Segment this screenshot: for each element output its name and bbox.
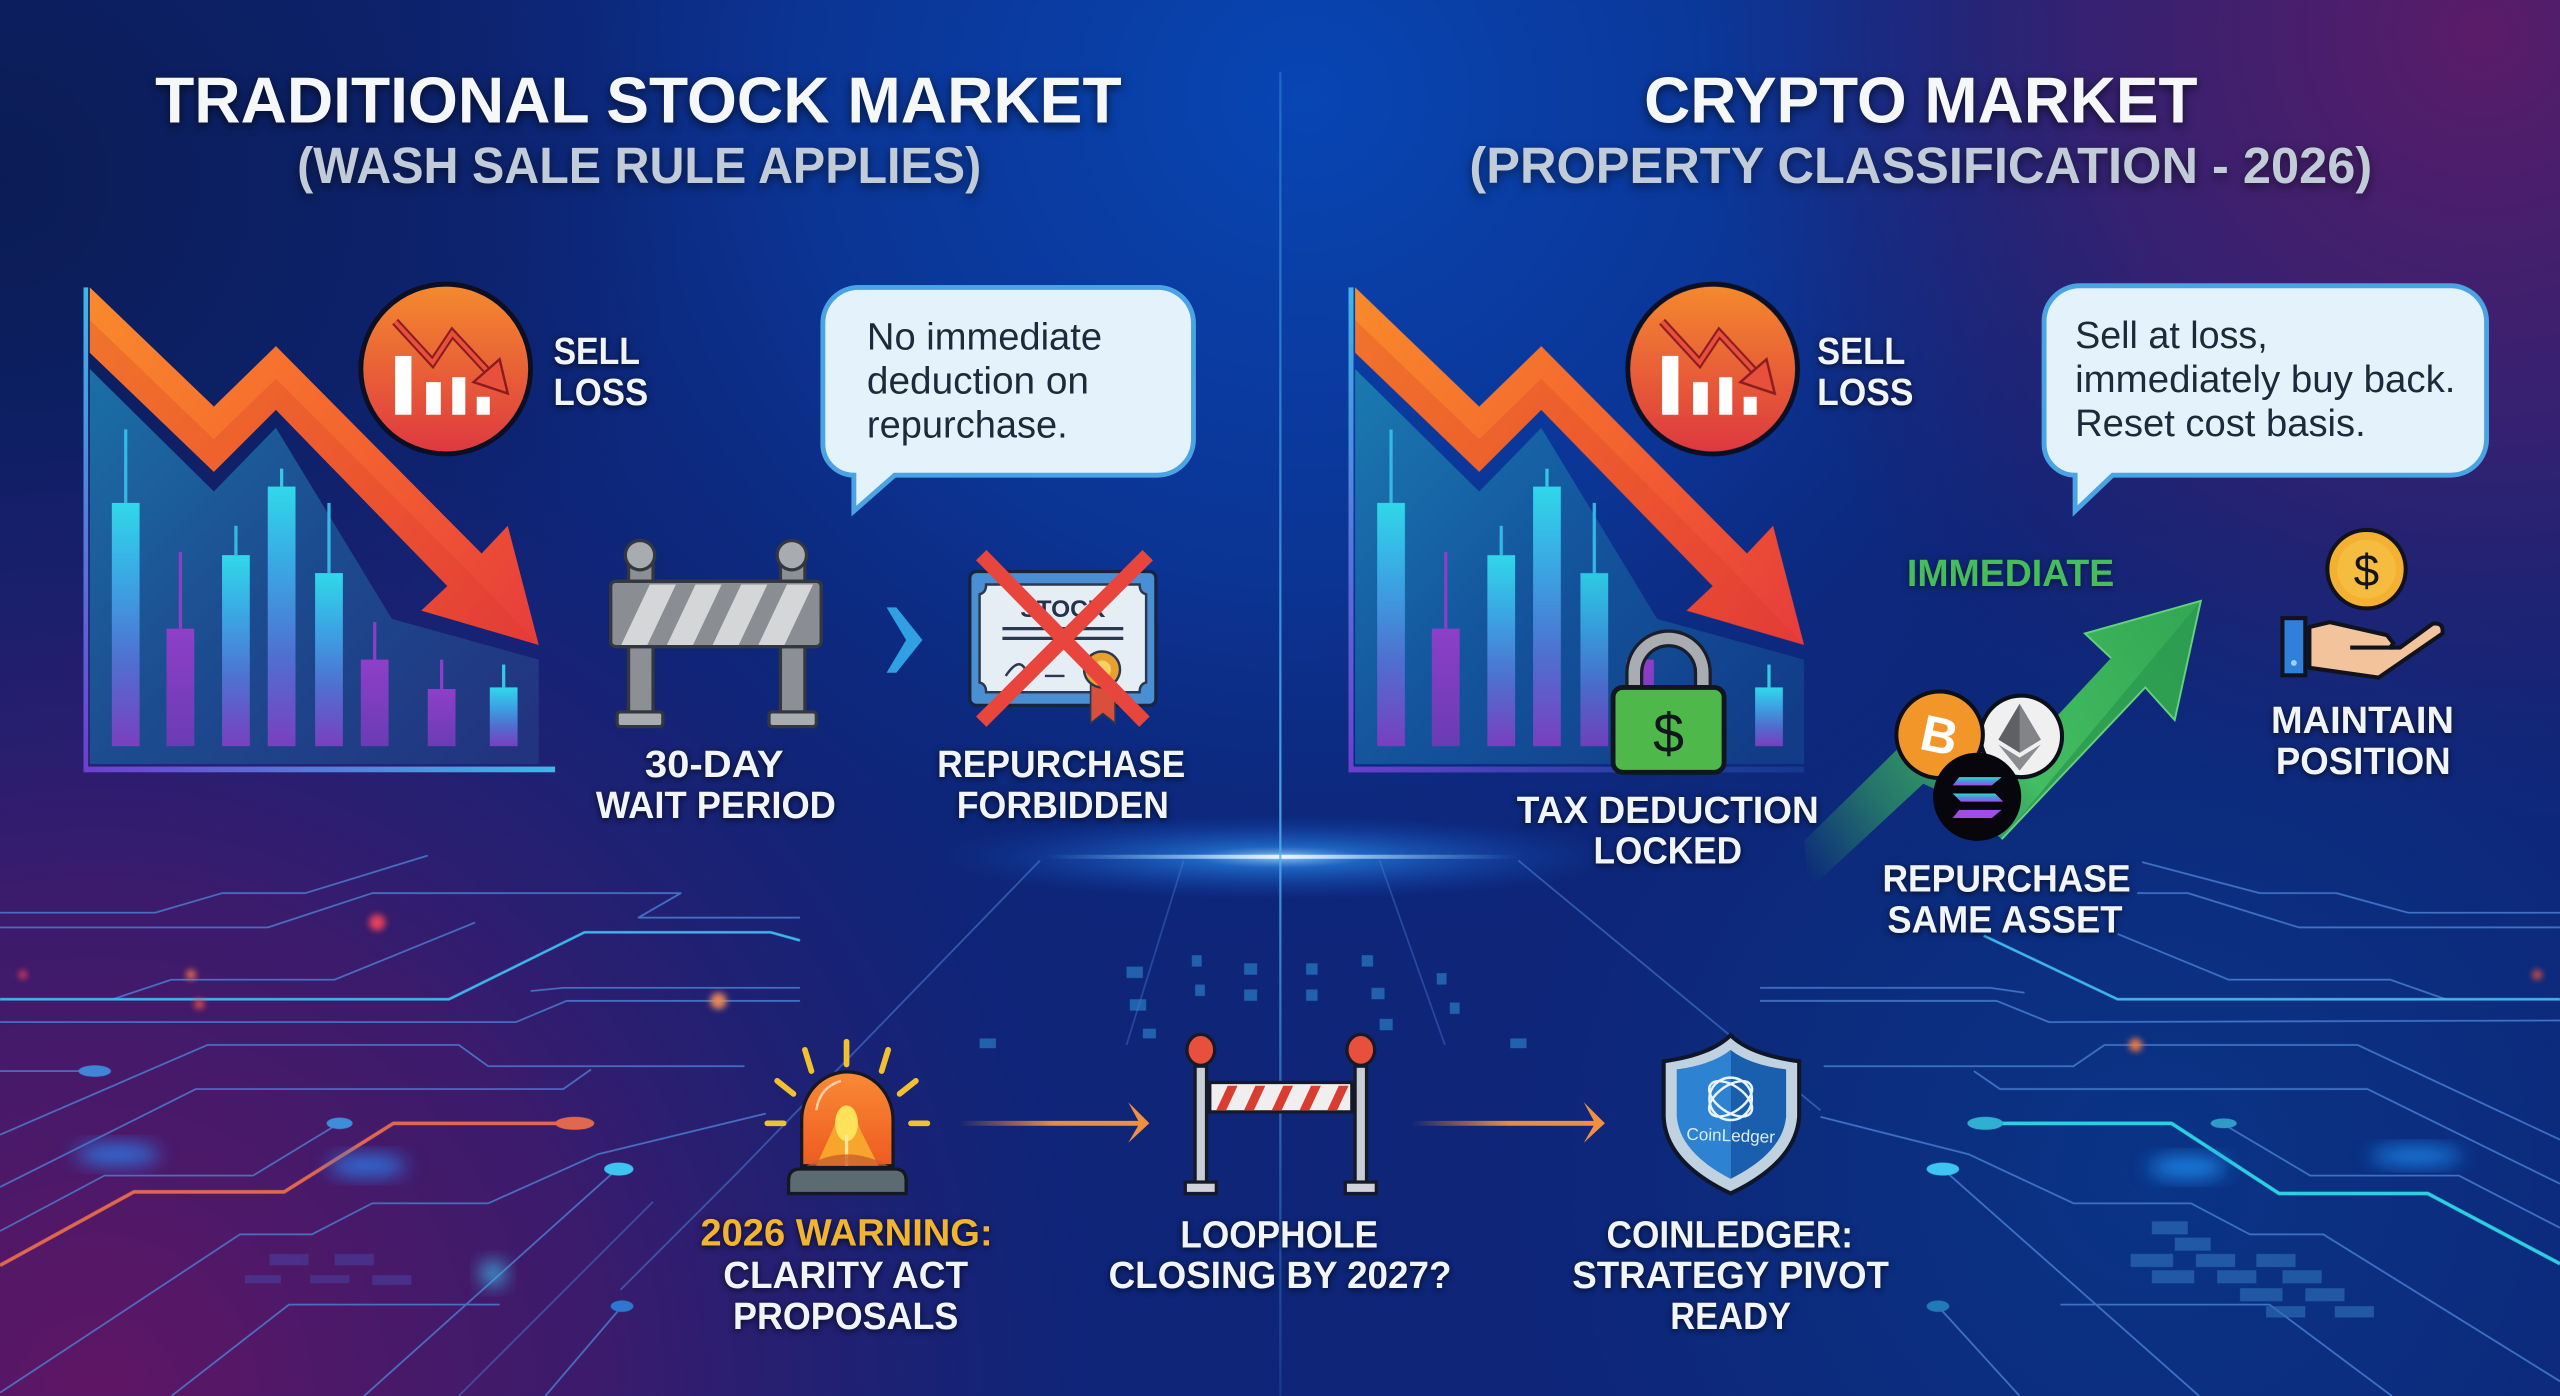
label: immediate: IMMEDIATE [1907,552,2114,594]
label: repurchase forbidden: REPURCHASE [937,743,1185,785]
icon: siren [767,1042,927,1194]
callout: sell at loss [2044,286,2487,511]
label: coinledger strategy: COINLEDGER: [1607,1213,1853,1255]
panel: traditional stock market [83,63,1193,826]
icon: stock certificate crossed out: STOCK [1020,596,1106,623]
icon: bitcoin: B [1916,704,1963,767]
label: tax deduction locked: TAX DEDUCTION [1517,789,1819,831]
callout: no immediate deduction: deduction on [867,360,1089,402]
label: repurchase forbidden [937,743,1185,826]
icon: sell loss badge [361,284,531,454]
icon: padlock with dollar: $ [1653,703,1684,765]
icon: coinledger shield: CoinLedger [1686,1124,1776,1147]
callout: no immediate deduction: repurchase. [867,404,1068,446]
icon: barrier [611,540,821,727]
label: maintain position [2271,699,2454,782]
label: 2026 warning [700,1212,993,1337]
label: coinledger strategy: STRATEGY PIVOT [1572,1254,1889,1296]
icon: crypto coins [1896,691,2062,841]
icon: closing gate [1185,1034,1376,1194]
title: traditional stock market [155,63,1122,194]
label: 30-day wait period: 30-DAY [645,743,784,785]
label: coinledger strategy [1572,1213,1889,1337]
callout: sell at loss: Sell at loss, [2075,314,2268,356]
icon: ethereum [1980,696,2062,777]
icon: padlock with dollar [1613,638,1724,772]
chart: falling candlesticks with red arrow [1349,287,1804,772]
label: maintain position: MAINTAIN [2271,699,2454,741]
icon: sell loss badge [1628,284,1798,454]
label: 30-day wait period [596,743,836,826]
title: crypto market: (PROPERTY CLASSIFICATION - 2026) [1469,137,2372,194]
label: sell loss [553,330,648,413]
arrow: warning to loophole [958,1102,1149,1143]
panel: 2026 warning timeline [700,1034,1889,1337]
title: traditional stock market: TRADITIONAL STOCK MARKET [155,63,1122,136]
label: sell loss: SELL [553,330,640,372]
label: loophole closing [1109,1213,1451,1296]
label: 2026 warning: CLARITY ACT [723,1254,968,1296]
icon: hand holding coin: $ [2354,545,2379,596]
label: sell loss [1817,330,1913,413]
icon: hand holding coin [2282,530,2443,678]
label: repurchase same asset: SAME ASSET [1887,898,2123,940]
label: repurchase same asset: REPURCHASE [1882,857,2131,899]
label: sell loss: LOSS [1817,371,1913,413]
icon: bitcoin [1896,691,1983,778]
label: coinledger strategy: READY [1670,1295,1791,1337]
label: repurchase same asset [1882,857,2131,940]
title: traditional stock market: (WASH SALE RULE APPLIES) [297,137,981,194]
label: sell loss: SELL [1817,330,1905,372]
arrow: loophole to coinledger [1411,1102,1605,1143]
panel: crypto market [1349,63,2487,940]
title: crypto market: CRYPTO MARKET [1644,63,2198,136]
label: 2026 warning: 2026 WARNING: [700,1212,993,1254]
label: tax deduction locked [1517,789,1819,872]
label: maintain position: POSITION [2276,740,2451,782]
label: 2026 warning: PROPOSALS [733,1295,958,1337]
center divider [1279,72,1281,1396]
callout: sell at loss: immediately buy back. [2075,358,2456,400]
label: 30-day wait period: WAIT PERIOD [596,784,836,826]
callout: no immediate deduction [823,287,1193,511]
icon: coinledger shield [1664,1035,1799,1194]
title: crypto market [1469,63,2372,194]
circuit board pattern [0,856,2560,1396]
chart: falling candlesticks with red arrow [83,287,555,772]
icon: solana [1933,753,2021,841]
arrow: chevron [887,607,922,673]
arrow: green rising [1804,601,2201,890]
callout: no immediate deduction: No immediate [867,315,1102,357]
label: tax deduction locked: LOCKED [1593,830,1742,872]
callout: sell at loss: Reset cost basis. [2075,402,2366,444]
icon: stock certificate crossed out [970,555,1156,723]
label: sell loss: LOSS [553,371,648,413]
label: loophole closing: CLOSING BY 2027? [1109,1254,1451,1296]
label: repurchase forbidden: FORBIDDEN [957,784,1169,826]
label: loophole closing: LOOPHOLE [1180,1213,1378,1255]
